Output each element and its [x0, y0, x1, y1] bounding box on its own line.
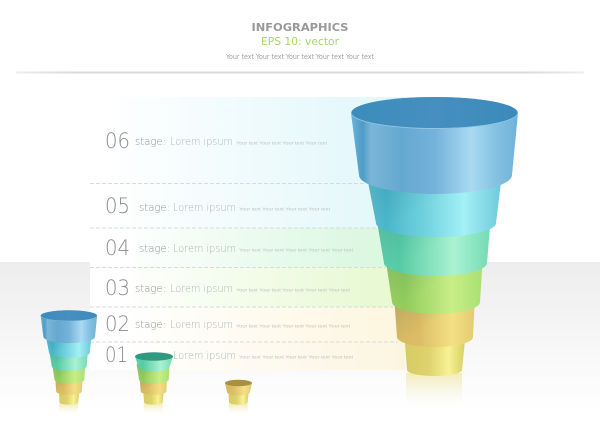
stage 02 row: Lorem ipsum [170, 318, 233, 331]
stage 05 row: 05 [105, 194, 130, 218]
subtitle: EPS 10: vector [261, 35, 339, 48]
large six-stage funnel [351, 97, 518, 404]
stage 04 row: Lorem ipsum [173, 242, 236, 255]
stage 01 row: 01 [105, 343, 128, 367]
stage 04 row: stage: [139, 242, 170, 255]
stage 06 row: Lorem ipsum [170, 135, 233, 148]
stage 04 row: Your text Your text Your text Your text Your text [239, 248, 354, 252]
small funnel: two stages [225, 380, 252, 414]
tagline: Your text Your text Your text Your text Your text [225, 53, 374, 61]
stage 05 row: Your text Your text Your text Your text [239, 206, 331, 212]
stage 05 row [105, 194, 331, 218]
stage 06 row [105, 129, 328, 153]
small funnel: four stages [135, 352, 173, 414]
stage 06 row: Your text Your text Your text Your text [236, 140, 328, 146]
stage 01 row [105, 343, 354, 367]
stage 03 row: Lorem ipsum [170, 282, 233, 295]
stage 03 row: 03 [105, 276, 130, 300]
stage 05 row: stage: [139, 201, 170, 214]
stage 04 row [105, 236, 354, 260]
stage 02 row [105, 312, 351, 336]
stage 05 row: Lorem ipsum [173, 201, 236, 214]
stage 02 row: 02 [105, 312, 130, 336]
stage 03 row: Your text Your text Your text Your text Your text [236, 288, 351, 292]
stage 01 row: Your text Your text Your text Your text Your text [239, 354, 354, 360]
stage 02 row: stage: [135, 318, 166, 331]
title: INFOGRAPHICS [252, 21, 349, 34]
small funnel: six stages [41, 310, 97, 414]
stage 02 row: Your text Your text Your text Your text Your text [236, 324, 351, 328]
stage panels [90, 97, 405, 370]
stage 06 row: stage: [135, 135, 166, 148]
stage 03 row [105, 276, 351, 300]
stage 04 row: 04 [105, 236, 130, 260]
floor background [0, 262, 600, 412]
stage 03 row: stage: [135, 282, 166, 295]
stage 06 row: 06 [105, 129, 130, 153]
stage 01 row: Lorem ipsum [173, 349, 236, 362]
